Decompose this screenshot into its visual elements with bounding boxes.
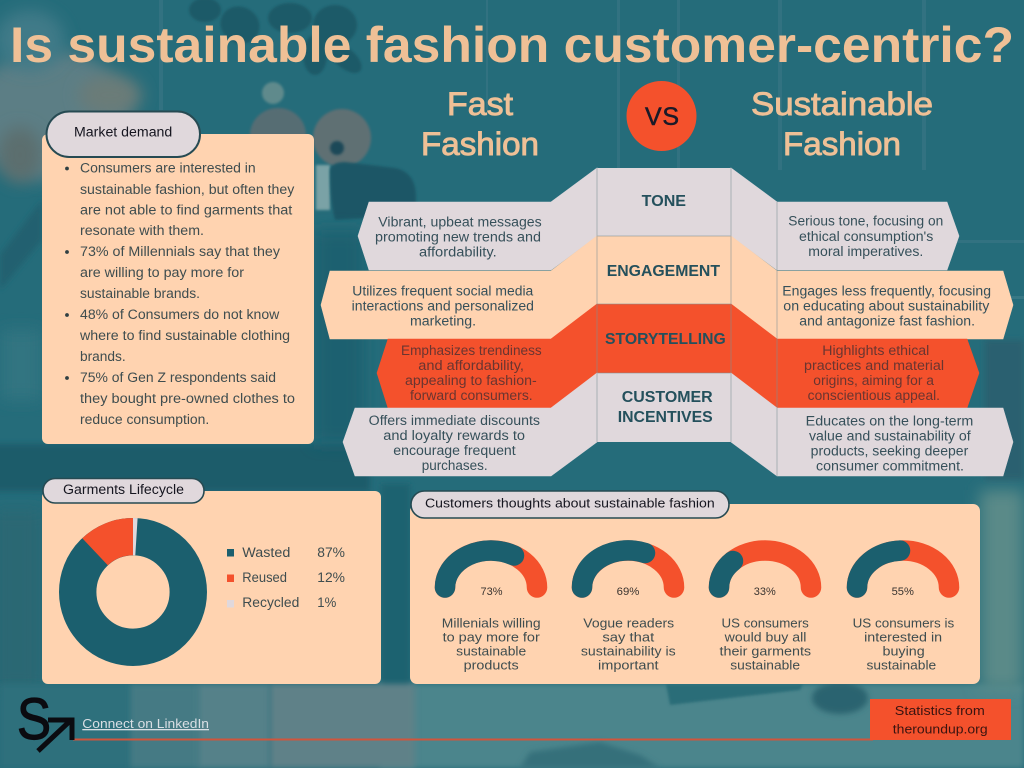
blurred flower top-left bbox=[0, 50, 130, 180]
gauge: us consumers 33%: US consumers bbox=[722, 615, 809, 630]
legend: Wasted bbox=[242, 545, 290, 560]
heading: fast fashion: Fashion bbox=[421, 126, 539, 162]
pill: market demand bbox=[46, 112, 200, 157]
market demand bullet list: they bought pre-owned clothes to bbox=[80, 391, 295, 406]
market demand bullet list: sustainable brands. bbox=[80, 286, 200, 301]
comparison: tone row: Vibrant, upbeat messages bbox=[378, 215, 542, 230]
lower band figure bbox=[0, 684, 130, 768]
comparison: engagement row: marketing. bbox=[410, 314, 476, 329]
gauge: vogue readers 69%: 69% bbox=[617, 586, 640, 598]
comparison: customer incentives row: Offers immediate discounts bbox=[369, 413, 540, 428]
gauge: us consumers 33%: sustainable bbox=[730, 657, 800, 672]
comparison: engagement row bbox=[321, 236, 1013, 339]
gauge: us consumers 55%: interested in bbox=[864, 629, 942, 644]
comparison: tone row: ethical consumption's bbox=[799, 229, 934, 244]
vs badge bbox=[626, 81, 696, 151]
gauge: millenials 73%: 73% bbox=[480, 586, 503, 598]
comparison: customer incentives row: consumer commitment. bbox=[816, 459, 964, 474]
comparison: storytelling row: forward consumers. bbox=[410, 388, 533, 403]
comparison: customer incentives row: products, seeking deeper bbox=[811, 444, 969, 459]
gauge: us consumers 55%: buying bbox=[882, 643, 925, 658]
market demand bullet list: brands. bbox=[80, 349, 126, 364]
comparison: storytelling row bbox=[377, 304, 979, 408]
comparison: storytelling row: practices and material bbox=[804, 358, 944, 373]
comparison: storytelling row: conscientious appeal. bbox=[808, 388, 940, 403]
comparison: storytelling row: appealing to fashion- bbox=[405, 373, 537, 388]
comparison: engagement row: Utilizes frequent social media bbox=[352, 284, 534, 299]
comparison: customer incentives row: encourage frequent bbox=[393, 443, 516, 458]
pill: market demand: Market demand bbox=[74, 125, 172, 140]
comparison: customer incentives row bbox=[343, 373, 1013, 476]
market demand bullet list bbox=[65, 161, 295, 427]
market demand bullet list: are not able to find garments that bbox=[80, 202, 293, 218]
comparison: tone row: Serious tone, focusing on bbox=[788, 214, 943, 229]
comparison: engagement row: interactions and personalized bbox=[352, 299, 534, 314]
comparison: engagement row: Engages less frequently, focusing bbox=[782, 284, 991, 299]
comparison: customer incentives row: CUSTOMER bbox=[622, 389, 713, 406]
gauge: us consumers 33% bbox=[719, 550, 812, 672]
comparison: customer incentives row: Educates on the long-term bbox=[806, 414, 973, 429]
market demand bullet list: where to find sustainable clothing bbox=[79, 328, 290, 343]
gauge: us consumers 55%: 55% bbox=[892, 586, 914, 598]
legend: 12% bbox=[317, 570, 345, 585]
source note: theroundup.org bbox=[893, 721, 988, 736]
gauge: us consumers 33%: would buy all bbox=[724, 629, 807, 644]
legend: Reused bbox=[242, 570, 287, 585]
comparison: tone row bbox=[358, 168, 959, 270]
heading: fast fashion bbox=[421, 86, 539, 162]
market demand bullet list: resonate with them. bbox=[80, 223, 204, 238]
comparison: tone row: TONE bbox=[642, 193, 686, 210]
market demand bullet list: 75% of Gen Z respondents said bbox=[80, 370, 276, 385]
gauge: vogue readers 69%: Vogue readers bbox=[583, 615, 675, 630]
logo: S bbox=[17, 687, 51, 752]
comparison: engagement row: and antagonize fast fashion. bbox=[799, 314, 975, 329]
comparison: tone row: promoting new trends and bbox=[375, 230, 541, 245]
gauge: vogue readers 69% bbox=[581, 550, 676, 672]
pill: customers thoughts bbox=[411, 491, 729, 518]
footer line bbox=[73, 738, 873, 740]
right margin bbox=[985, 340, 1024, 480]
gauge: millenials 73% bbox=[442, 550, 541, 672]
gauge: us consumers 33%: their garments bbox=[720, 643, 812, 658]
gauge: vogue readers 69%: say that bbox=[602, 629, 655, 644]
gauge: millenials 73%: to pay more for bbox=[443, 629, 541, 644]
title: Is sustainable fashion customer-centric? bbox=[10, 17, 1014, 73]
comparison: engagement row: on educating about sustainability bbox=[783, 299, 990, 314]
vs badge: VS bbox=[645, 103, 679, 131]
pill: customers thoughts: Customers thoughts about sustainable fashion bbox=[425, 495, 715, 510]
legend: 1% bbox=[317, 595, 336, 610]
comparison: storytelling row: and affordability, bbox=[418, 358, 524, 373]
comparison: customer incentives row: purchases. bbox=[422, 458, 488, 473]
gauge: us consumers 55% bbox=[853, 550, 955, 672]
heading: fast fashion: Fast bbox=[447, 86, 513, 122]
comparison: storytelling row: Emphasizes trendiness bbox=[401, 343, 542, 358]
pill: garments lifecycle bbox=[43, 478, 204, 503]
comparison: customer incentives row: INCENTIVES bbox=[618, 409, 713, 426]
gauge: us consumers 55%: sustainable bbox=[866, 657, 936, 672]
heading: sustainable fashion: Sustainable bbox=[751, 86, 933, 122]
glasses shape bbox=[316, 165, 330, 210]
market demand bullet list: sustainable fashion, but often they bbox=[80, 182, 295, 197]
donut chart bbox=[78, 518, 188, 647]
legend bbox=[227, 545, 345, 610]
pill: garments lifecycle: Garments Lifecycle bbox=[63, 482, 184, 497]
gauge: millenials 73%: Millenials willing bbox=[442, 615, 541, 630]
panel: market demand bbox=[42, 134, 314, 444]
source note: Statistics from bbox=[895, 703, 985, 718]
market demand bullet list: reduce consumption. bbox=[80, 412, 209, 427]
lower left dark foliage bbox=[0, 444, 370, 491]
legend: Recycled bbox=[242, 595, 299, 610]
comparison: engagement row: ENGAGEMENT bbox=[607, 263, 720, 280]
comparison: storytelling row: STORYTELLING bbox=[605, 331, 726, 348]
comparison: tone row: moral imperatives. bbox=[808, 244, 923, 259]
gauge: vogue readers 69%: sustainability is bbox=[581, 643, 676, 658]
comparison: customer incentives row: and loyalty rewards to bbox=[383, 428, 525, 443]
heading: sustainable fashion bbox=[751, 86, 933, 162]
hanging leaves bbox=[189, 0, 367, 79]
gauge: millenials 73%: sustainable bbox=[456, 643, 526, 658]
gauge: millenials 73%: products bbox=[464, 657, 519, 672]
panel: customers thoughts bbox=[410, 504, 980, 684]
legend: 87% bbox=[317, 545, 345, 560]
source note bbox=[870, 699, 1011, 740]
comparison: customer incentives row: value and sustainability of bbox=[809, 429, 971, 444]
linkedin link: Connect on LinkedIn bbox=[82, 716, 209, 731]
panel: garments lifecycle bbox=[42, 491, 381, 684]
gauge: us consumers 33%: 33% bbox=[754, 586, 776, 598]
market demand bullet list: 48% of Consumers do not know bbox=[80, 307, 280, 322]
comparison: storytelling row: origins, aiming for a bbox=[813, 373, 934, 388]
gauge: vogue readers 69%: important bbox=[598, 657, 659, 672]
flowers bbox=[250, 108, 306, 162]
heading: sustainable fashion: Fashion bbox=[783, 126, 901, 162]
comparison: storytelling row: Highlights ethical bbox=[822, 343, 929, 358]
comparison: tone row: affordability. bbox=[419, 245, 497, 260]
market demand bullet list: 73% of Millennials say that they bbox=[80, 244, 280, 259]
market demand bullet list: are willing to pay more for bbox=[80, 265, 245, 280]
gauge: us consumers 55%: US consumers is bbox=[853, 615, 955, 630]
market demand bullet list: Consumers are interested in bbox=[80, 161, 256, 176]
